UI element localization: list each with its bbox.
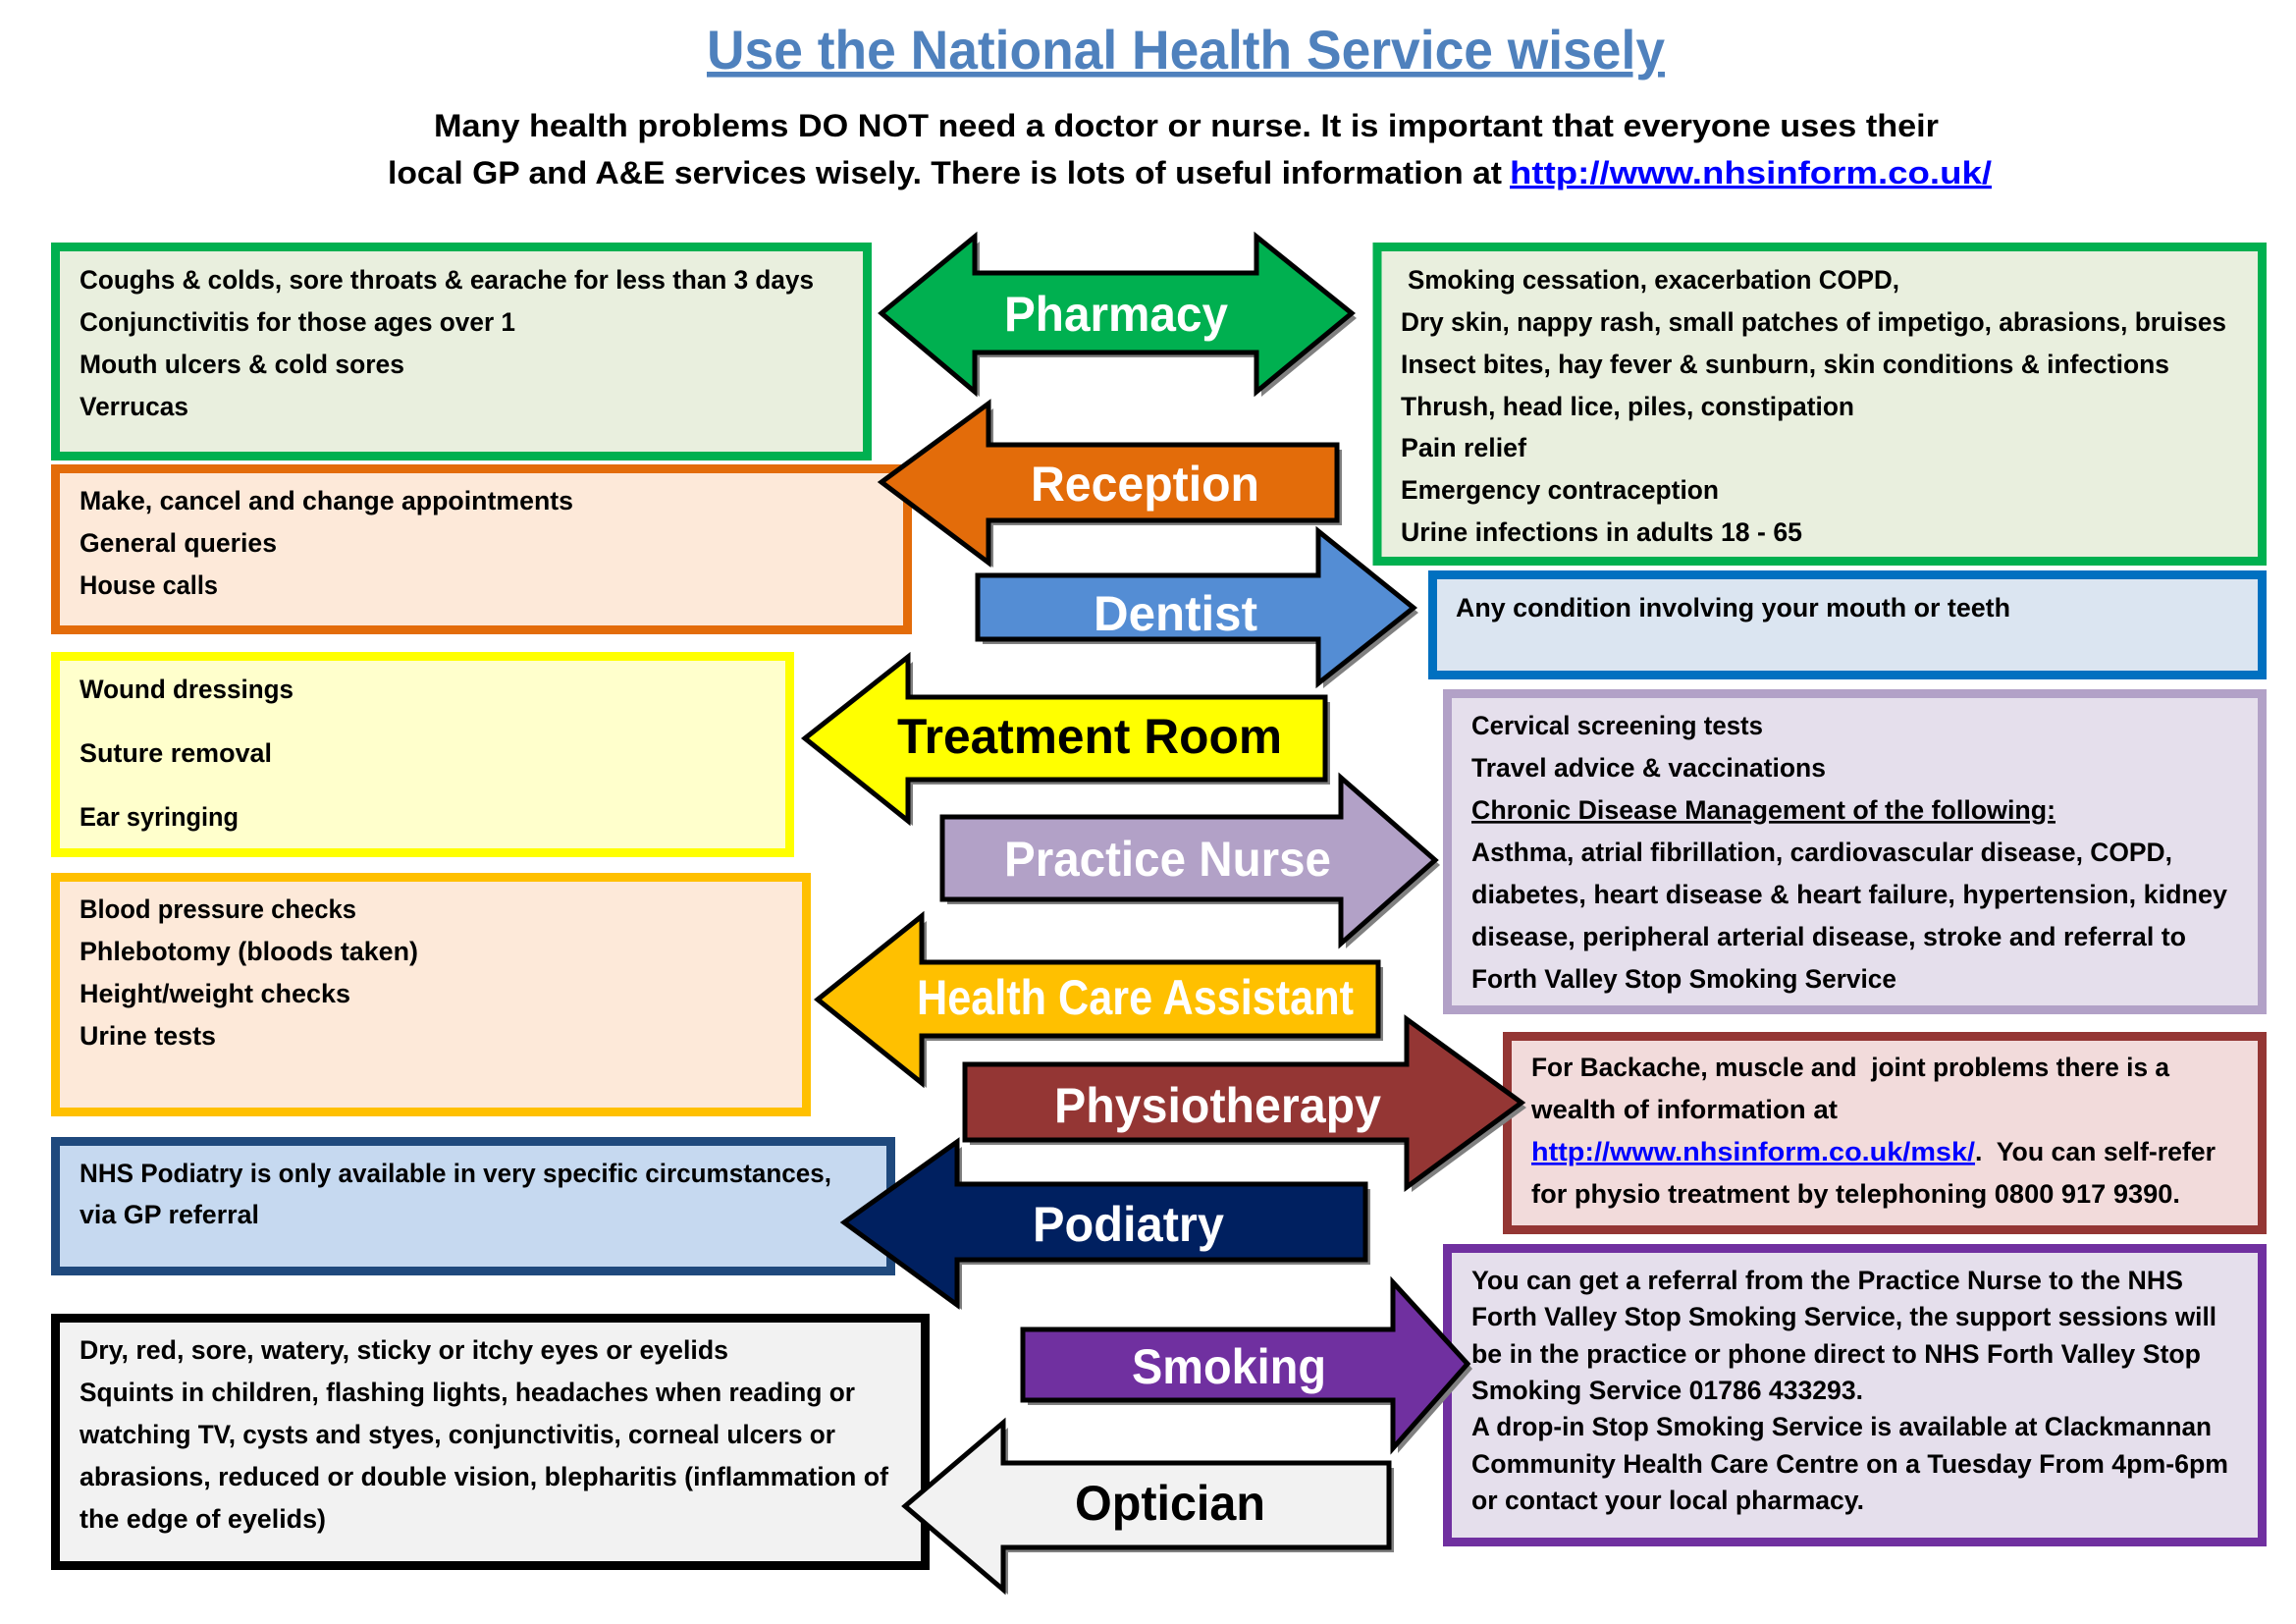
- panel: pharmacy conditions left: Verrucas: [80, 392, 188, 421]
- panel: optician: the edge of eyelids): [80, 1504, 326, 1534]
- panel: health care assistant: Blood pressure checks: [80, 894, 356, 924]
- arrow: pharmacy: Pharmacy: [1004, 287, 1228, 342]
- arrow: smoking: [1023, 1282, 1472, 1453]
- panel: optician: [55, 1318, 925, 1565]
- panel: pharmacy conditions right: Insect bites, hay fever & sunburn, skin conditions & infections: [1401, 350, 2169, 379]
- panel: optician: abrasions, reduced or double vision, blepharitis (inflammation of: [80, 1462, 888, 1491]
- panel: health care assistant: Height/weight checks: [80, 979, 350, 1008]
- panel: reception: [55, 469, 907, 630]
- panel: smoking: You can get a referral from the Practice Nurse to the NHS: [1471, 1266, 2183, 1295]
- panel: smoking: Community Health Care Centre on a Tuesday From 4pm-6pm: [1471, 1449, 2228, 1479]
- arrow: smoking: Smoking: [1132, 1339, 1326, 1394]
- panel: practice nurse: Asthma, atrial fibrillation, cardiovascular disease, COPD,: [1471, 838, 2172, 867]
- panel: pharmacy conditions left: [55, 247, 868, 456]
- panel: physiotherapy: http://www.nhsinform.co.uk/msk/: [1531, 1137, 1976, 1166]
- panel: pharmacy conditions right: [1377, 247, 2262, 562]
- panel: treatment room: Suture removal: [80, 738, 272, 768]
- panel: physiotherapy: for physio treatment by telephoning 0800 917 9390.: [1531, 1179, 2180, 1209]
- arrow: reception: [881, 404, 1342, 568]
- panel: pharmacy conditions right: Smoking cessation, exacerbation COPD,: [1408, 265, 1899, 295]
- panel: smoking: or contact your local pharmacy.: [1471, 1486, 1864, 1515]
- panel: smoking: [1447, 1249, 2262, 1542]
- panel: practice nurse: [1447, 693, 2262, 1009]
- panel: health care assistant: [55, 878, 807, 1111]
- arrow: pharmacy: [881, 237, 1357, 397]
- panel: optician: Squints in children, flashing lights, headaches when reading or: [80, 1378, 855, 1407]
- panel: optician: Dry, red, sore, watery, sticky or itchy eyes or eyelids: [80, 1335, 728, 1365]
- panel: physiotherapy: [1508, 1037, 2262, 1229]
- panel: physiotherapy: wealth of information at: [1530, 1095, 1838, 1124]
- arrow: practice nurse: [942, 778, 1440, 948]
- arrow: dentist: [978, 531, 1418, 688]
- panel: smoking: be in the practice or phone direct to NHS Forth Valley Stop: [1471, 1339, 2201, 1369]
- arrow: reception: Reception: [1031, 457, 1259, 512]
- arrow: physiotherapy: Physiotherapy: [1054, 1078, 1381, 1133]
- panel: podiatry: NHS Podiatry is only available in very specific circumstances,: [80, 1159, 831, 1188]
- panel: health care assistant: Urine tests: [80, 1021, 216, 1051]
- panel: physiotherapy: For Backache, muscle and joint problems there is a: [1531, 1053, 2169, 1082]
- panel: reception: General queries: [80, 528, 277, 558]
- panel: practice nurse: Travel advice & vaccinations: [1471, 753, 1826, 783]
- panel: practice nurse: disease, peripheral arterial disease, stroke and referral to: [1471, 922, 2186, 951]
- panel: treatment room: Wound dressings: [80, 675, 294, 704]
- panel: smoking: Forth Valley Stop Smoking Service, the support sessions will: [1471, 1302, 2216, 1331]
- panel: practice nurse: Forth Valley Stop Smoking Service: [1471, 964, 1896, 994]
- panel: reception: House calls: [80, 570, 218, 600]
- arrow: physiotherapy: [965, 1019, 1526, 1192]
- intro text: local GP and A&E services wisely. There is lots of useful information at: [388, 155, 1502, 190]
- panel: treatment room: [55, 656, 789, 852]
- arrow: practice nurse: Practice Nurse: [1004, 832, 1331, 887]
- panel: podiatry: [55, 1141, 891, 1271]
- panel: practice nurse: Cervical screening tests: [1471, 711, 1763, 740]
- arrow: optician: [905, 1423, 1394, 1595]
- panel: pharmacy conditions right: Emergency contraception: [1401, 475, 1719, 505]
- panel: pharmacy conditions right: Urine infections in adults 18 - 65: [1401, 517, 1802, 547]
- panel: practice nurse: diabetes, heart disease & heart failure, hypertension, kidney: [1471, 880, 2227, 909]
- panel: practice nurse: Chronic Disease Management of the following:: [1471, 795, 2056, 825]
- arrow: treatment room: Treatment Room: [897, 709, 1282, 764]
- panel: smoking: Smoking Service 01786 433293.: [1471, 1376, 1863, 1405]
- panel: pharmacy conditions left: Conjunctivitis for those ages over 1: [80, 307, 515, 337]
- panel: dentist: [1433, 575, 2262, 676]
- intro text: Many health problems DO NOT need a doctor or nurse. It is important that everyone uses their: [434, 108, 1939, 143]
- panel: pharmacy conditions left: Mouth ulcers & cold sores: [80, 350, 404, 379]
- panel: pharmacy conditions right: Pain relief: [1401, 433, 1526, 462]
- arrow: podiatry: [844, 1142, 1370, 1310]
- arrow: podiatry: Podiatry: [1033, 1197, 1224, 1252]
- title: Use the National Health Service wisely: [707, 19, 1665, 81]
- arrow: health care assistant: Health Care Assistant: [917, 970, 1354, 1025]
- panel: pharmacy conditions left: Coughs & colds, sore throats & earache for less than 3 days: [80, 265, 814, 295]
- panel: pharmacy conditions right: Thrush, head lice, piles, constipation: [1401, 392, 1854, 421]
- panel: treatment room: Ear syringing: [80, 802, 239, 832]
- panel: health care assistant: Phlebotomy (bloods taken): [80, 937, 418, 966]
- panel: optician: watching TV, cysts and styes, conjunctivitis, corneal ulcers or: [79, 1420, 835, 1449]
- arrow: treatment room: [805, 657, 1330, 826]
- intro text: http://www.nhsinform.co.uk/: [1510, 155, 1992, 190]
- panel: podiatry: via GP referral: [80, 1200, 259, 1229]
- arrow: dentist: Dentist: [1094, 586, 1257, 641]
- panel: pharmacy conditions right: Dry skin, nappy rash, small patches of impetigo, abrasions, bruises: [1401, 307, 2226, 337]
- panel: reception: Make, cancel and change appointments: [80, 486, 573, 515]
- panel: dentist: Any condition involving your mouth or teeth: [1456, 593, 2010, 623]
- intro text: [388, 108, 1992, 190]
- arrow: optician: Optician: [1075, 1476, 1265, 1531]
- panel: physiotherapy: . You can self-refer: [1975, 1137, 2216, 1166]
- arrow: health care assistant: [818, 916, 1383, 1088]
- panel: smoking: A drop-in Stop Smoking Service is available at Clackmannan: [1471, 1412, 2212, 1441]
